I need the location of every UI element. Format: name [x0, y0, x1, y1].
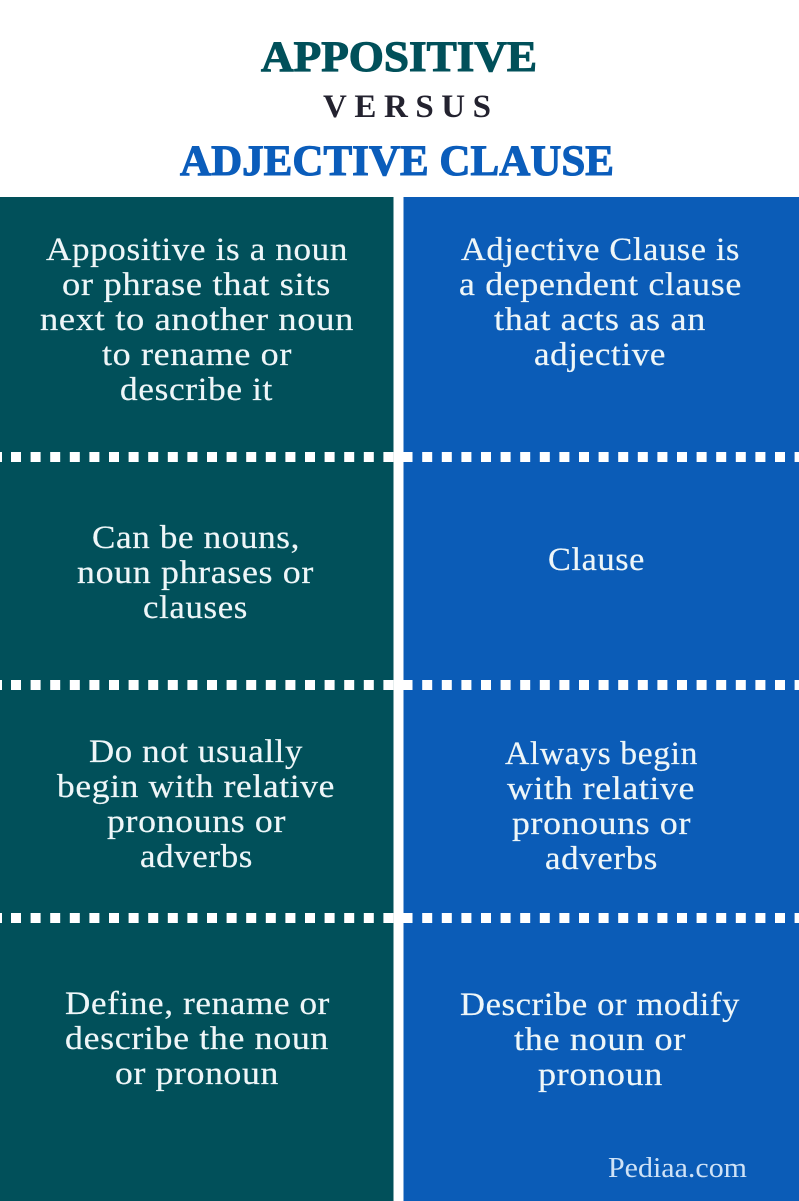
row 2 left: forms of appositive: clauses — [143, 590, 248, 626]
row 1 right: adjective clause definition: a dependent clause — [459, 267, 742, 303]
row 2 left: forms of appositive: noun phrases or — [77, 555, 314, 591]
title: appositive: APPOSITIVE — [261, 34, 537, 81]
row 3 left: appositive beginnings — [57, 734, 335, 875]
title: adjective clause: ADJECTIVE CLAUSE — [180, 138, 614, 185]
row 2 right: form of adjective clause: Clause — [548, 542, 645, 578]
row 4 left: appositive function: Define, rename or — [65, 986, 330, 1022]
row 1 left: appositive definition: to rename or — [102, 337, 292, 373]
dotted separator 2 — [0, 680, 799, 690]
row 4 left: appositive function — [65, 986, 330, 1092]
row 3 right: adjective clause beginnings — [505, 736, 698, 877]
dotted separator 3 — [0, 913, 799, 923]
title: versus: VERSUS — [323, 89, 491, 125]
panel: appositive column — [0, 197, 394, 1201]
row 2 left: forms of appositive — [77, 520, 314, 626]
row 1 left: appositive definition: or phrase that sits — [62, 267, 331, 303]
row 1 left: appositive definition: Appositive is a noun — [46, 232, 348, 268]
row 1 left: appositive definition — [40, 232, 354, 408]
row 1 right: adjective clause definition: adjective — [534, 337, 666, 373]
row 3 left: appositive beginnings: Do not usually — [89, 734, 303, 770]
row 1 left: appositive definition: next to another noun — [40, 302, 354, 338]
row 4 right: adjective clause function — [460, 987, 740, 1093]
row 4 right: adjective clause function: Describe or modify — [460, 987, 740, 1023]
row 3 right: adjective clause beginnings: Always begin — [505, 736, 698, 772]
row 4 left: appositive function: or pronoun — [115, 1056, 279, 1092]
row 3 right: adjective clause beginnings: with relative — [507, 771, 695, 807]
row 4 right: adjective clause function: the noun or — [514, 1022, 686, 1058]
row 3 right: adjective clause beginnings: pronouns or — [512, 806, 691, 842]
row 1 left: appositive definition: describe it — [120, 372, 273, 408]
row 3 left: appositive beginnings: pronouns or — [107, 804, 286, 840]
row 2 left: forms of appositive: Can be nouns, — [92, 520, 300, 556]
row 3 left: appositive beginnings: begin with relative — [57, 769, 335, 805]
row 1 right: adjective clause definition: that acts as an — [494, 302, 706, 338]
row 1 right: adjective clause definition: Adjective Clause is — [461, 232, 740, 268]
row 4 right: adjective clause function: pronoun — [538, 1057, 663, 1093]
row 3 right: adjective clause beginnings: adverbs — [545, 841, 658, 877]
dotted separator 1 — [0, 452, 799, 462]
row 1 right: adjective clause definition — [459, 232, 742, 373]
row 4 left: appositive function: describe the noun — [65, 1021, 329, 1057]
row 3 left: appositive beginnings: adverbs — [140, 839, 253, 875]
brand: Pediaa.com: Pediaa.com — [608, 1153, 747, 1184]
panel: adjective clause column — [404, 197, 799, 1201]
